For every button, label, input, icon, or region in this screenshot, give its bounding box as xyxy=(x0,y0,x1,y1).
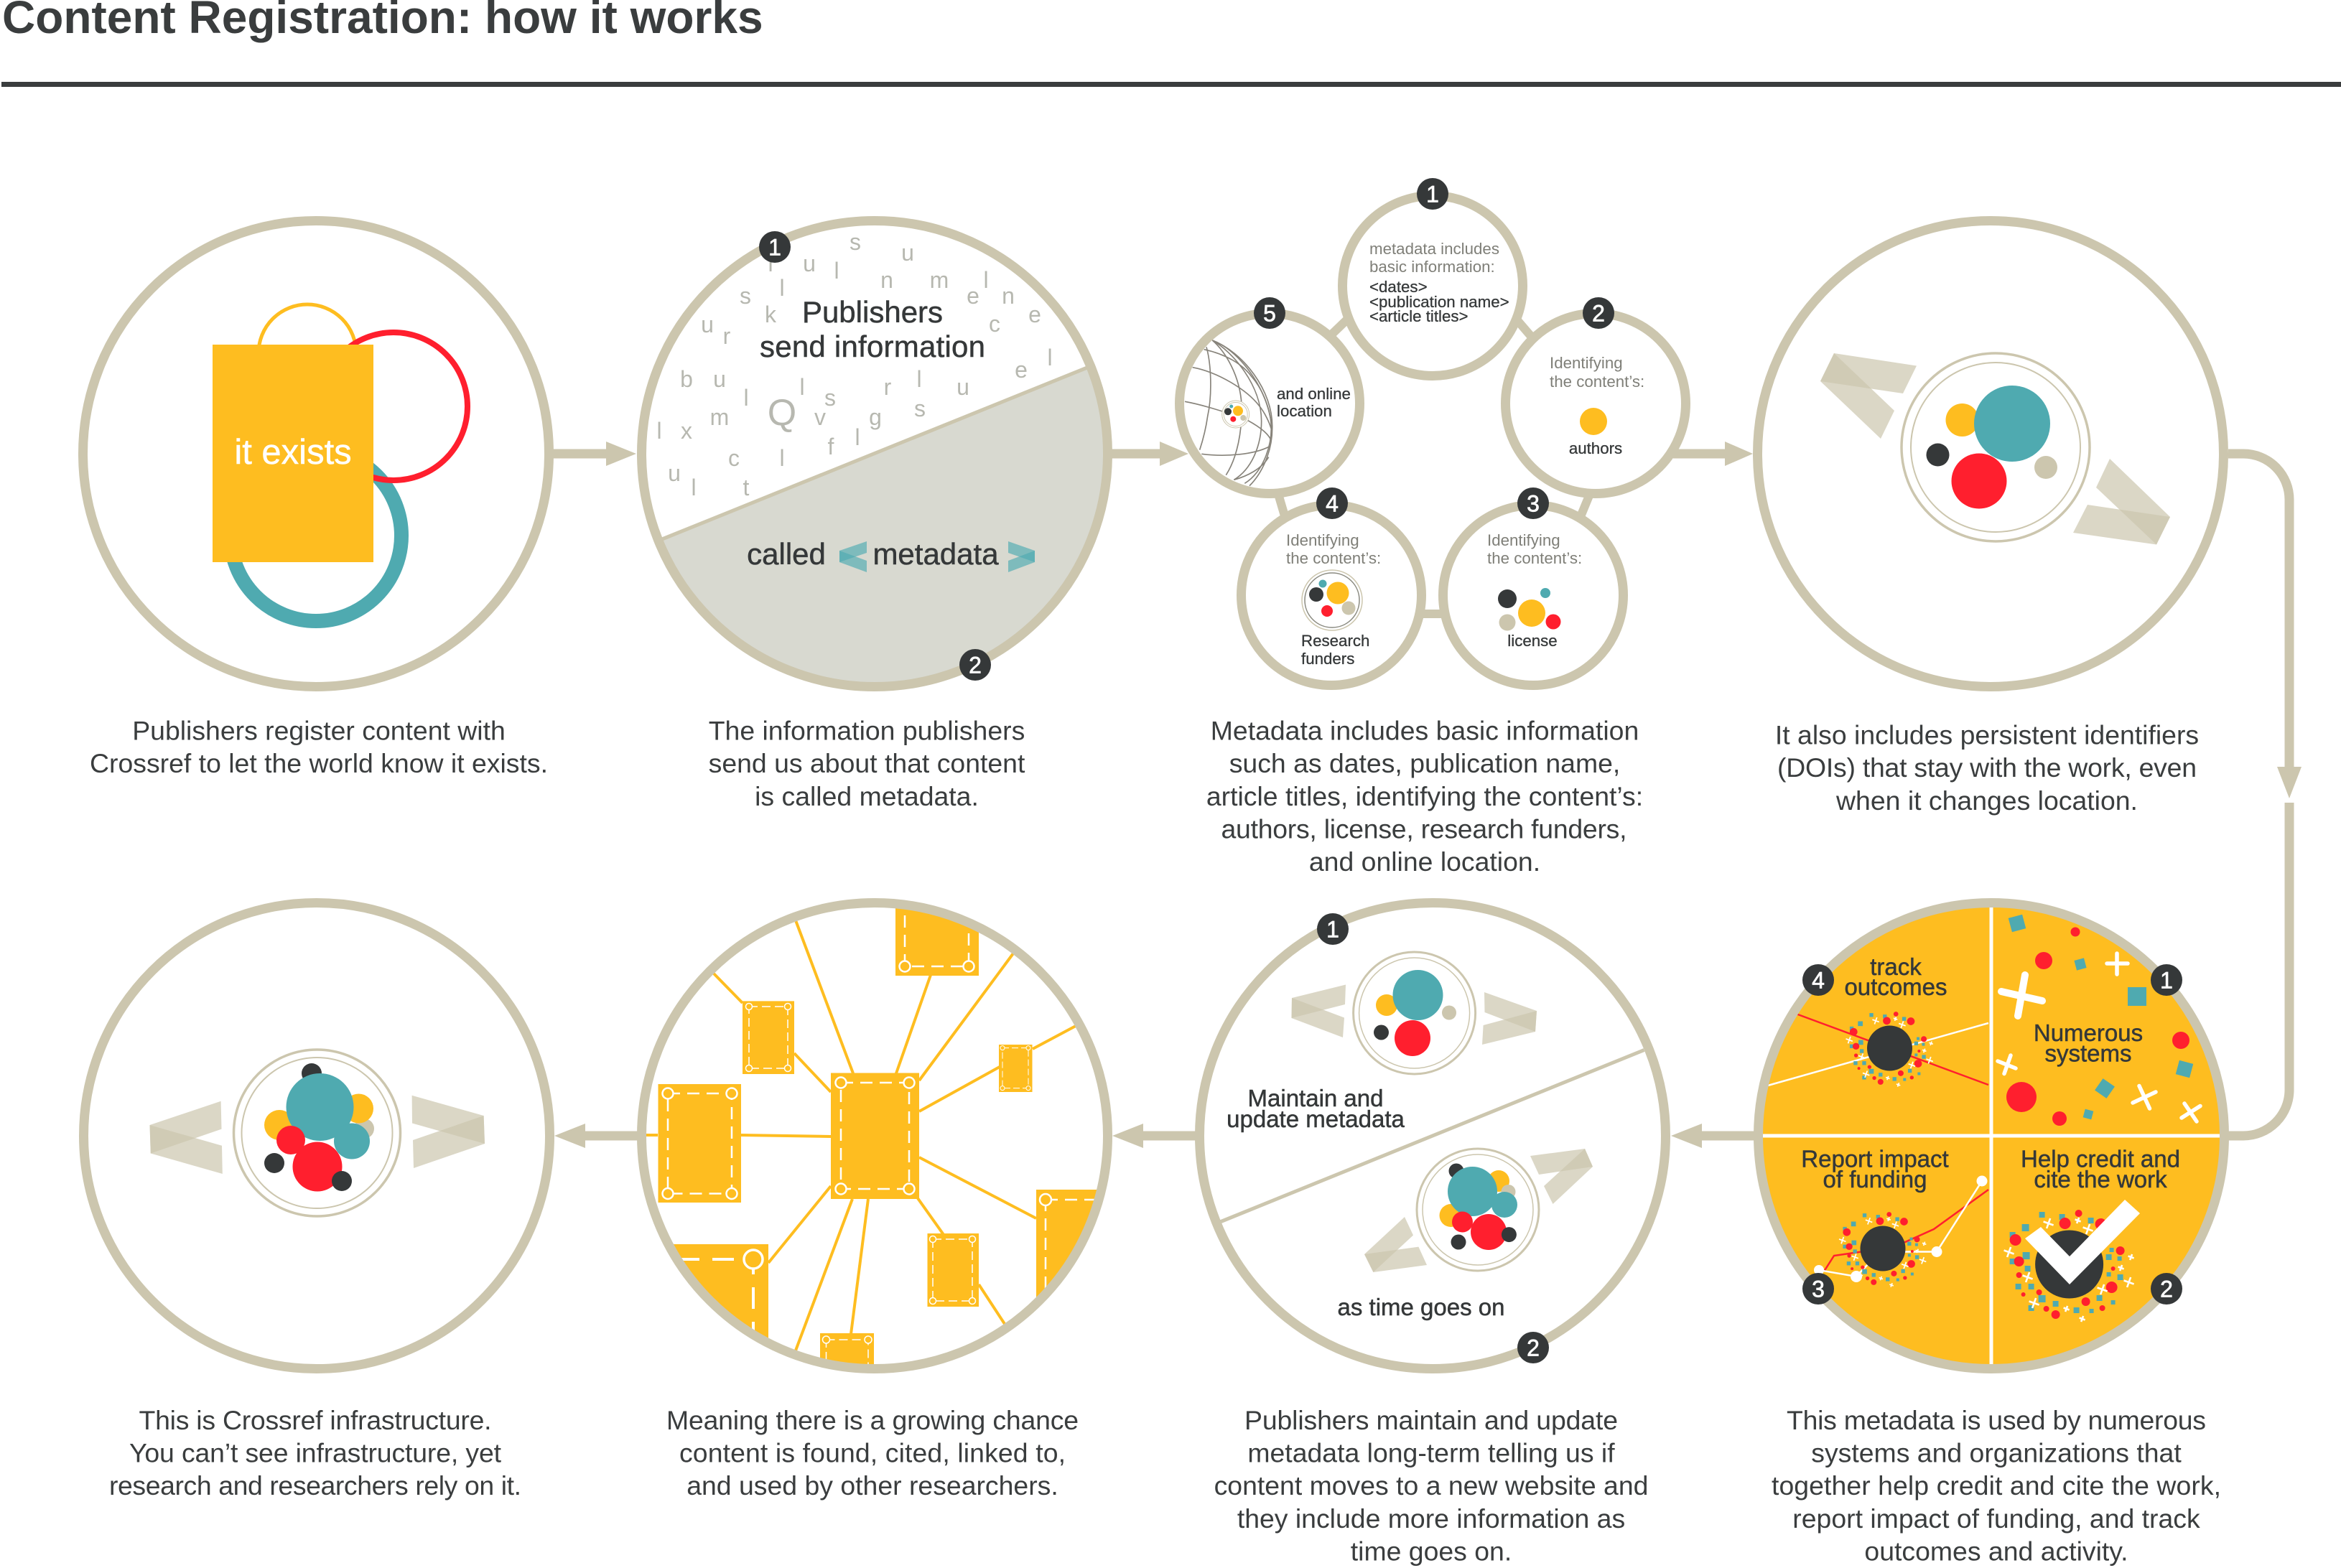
arrow: step 5 to step 6 xyxy=(1671,1124,1759,1148)
heading: publishers send information: send information xyxy=(760,330,985,363)
scattered letters: v xyxy=(814,404,826,430)
circle 2: authors: Identifying xyxy=(1550,354,1623,372)
lower right document xyxy=(928,1233,979,1307)
circle 2: authors: the content’s: xyxy=(1550,373,1644,391)
caption: step 8: research and researchers rely on it. xyxy=(109,1470,521,1501)
circle 1: basic information: <publication name> xyxy=(1369,293,1509,311)
circle 1: basic information: metadata includes xyxy=(1369,240,1499,258)
emblem xyxy=(234,1050,401,1216)
icon: red ring xyxy=(320,332,467,480)
quadrant 2: credit and cite xyxy=(2004,1146,2180,1322)
icon: top right bracket xyxy=(1482,992,1537,1045)
icon: lower right bracket xyxy=(1530,1149,1593,1204)
scattered letters: g xyxy=(869,404,882,430)
caption: step 8: You can’t see infrastructure, yet xyxy=(129,1437,502,1467)
scattered letters: s xyxy=(740,283,751,309)
header rule xyxy=(1,82,2341,87)
big right document xyxy=(1036,1190,1097,1297)
badge 1: 1 xyxy=(1426,181,1439,207)
scattered letters xyxy=(656,229,1053,500)
badge 5: 5 xyxy=(1263,300,1276,326)
scattered letters: c xyxy=(728,445,740,471)
circle 3: license: the content’s: xyxy=(1487,549,1582,567)
caption: step 8 xyxy=(109,1405,521,1501)
scattered letters: l xyxy=(1047,345,1053,370)
caption: step 2 xyxy=(709,715,1025,811)
scattered letters: u xyxy=(957,374,969,400)
arrow: step 1 to step 2 xyxy=(553,442,636,466)
badge 1 xyxy=(759,231,791,263)
heading: publishers send information xyxy=(760,295,985,363)
divider line xyxy=(662,368,1087,539)
quadrant 1: numerous systems: Numerous xyxy=(2034,1019,2143,1046)
circle 4: research funders: Identifying xyxy=(1286,531,1359,549)
panel: crossref infrastructure circle xyxy=(83,903,550,1368)
label: maintain and update metadata xyxy=(1227,1085,1405,1132)
quadrant 3: report impact of funding xyxy=(1801,1146,1988,1287)
badge 3: 3 xyxy=(1527,491,1540,517)
badge 2: 2 xyxy=(969,652,982,678)
caption: step 5: systems and organizations that xyxy=(1811,1437,2182,1467)
scattered letters: l xyxy=(768,251,773,276)
badge 2 xyxy=(1517,1332,1549,1363)
scattered letters: k xyxy=(765,302,777,327)
quadrant 3: report impact of funding: of funding xyxy=(1823,1166,1927,1193)
scattered letters: r xyxy=(884,374,892,400)
caption: step 5 xyxy=(1772,1405,2221,1567)
scattered letters: b xyxy=(680,366,693,392)
caption: step 3: Metadata includes basic information xyxy=(1211,715,1639,745)
circle 5: online location xyxy=(1179,313,1360,494)
caption: step 6: Publishers maintain and update xyxy=(1244,1405,1618,1435)
big bottom left document xyxy=(674,1244,768,1338)
circle 1: basic information xyxy=(1343,195,1522,376)
panel: numerous systems yellow circle xyxy=(1758,903,2225,1368)
badge 3 xyxy=(1517,487,1549,519)
scattered letters: l xyxy=(743,385,749,411)
icon: yellow document xyxy=(213,345,373,562)
scattered letters: m xyxy=(710,404,729,430)
centre document xyxy=(831,1073,919,1199)
quadrant 4: track outcomes: outcomes xyxy=(1844,974,1947,1000)
network links xyxy=(639,920,1076,1350)
icon: teal left bracket xyxy=(839,541,867,572)
caption: step 7: content is found, cited, linked to, xyxy=(679,1437,1066,1467)
caption: step 8: This is Crossref infrastructure. xyxy=(139,1405,491,1435)
circle 3: license xyxy=(1443,505,1623,685)
caption: step 2: The information publishers xyxy=(709,715,1025,745)
panel: network of content circle xyxy=(637,898,1112,1373)
scattered letters: s xyxy=(914,396,926,421)
caption: step 6: metadata long-term telling us if xyxy=(1247,1437,1615,1467)
badge 4 xyxy=(1802,964,1834,996)
scattered letters: r xyxy=(723,323,731,349)
caption: step 5: report impact of funding, and track xyxy=(1792,1503,2200,1534)
scattered letters: x xyxy=(681,418,692,444)
scattered letters: l xyxy=(983,267,989,293)
circle 4: research funders: the content’s: xyxy=(1286,549,1381,567)
scattered letters: l xyxy=(779,445,785,471)
scattered letters: u xyxy=(901,240,914,266)
caption: step 6: they include more information as xyxy=(1237,1503,1625,1534)
arrow: step 6 to step 7 xyxy=(1112,1124,1199,1148)
scattered letters: n xyxy=(1002,283,1015,309)
icon: top left bracket xyxy=(1291,985,1346,1037)
label: maintain and update metadata: update metadata xyxy=(1227,1106,1405,1132)
label: it exists: it exists xyxy=(234,433,352,472)
arrow: step 7 to step 8 xyxy=(554,1124,641,1148)
label: called metadata: metadata xyxy=(872,537,999,571)
caption: step 4: It also includes persistent identifiers xyxy=(1775,719,2199,750)
quadrant 4: track outcomes xyxy=(1767,953,1988,1087)
caption: step 4: when it changes location. xyxy=(1835,785,2138,816)
upper left document xyxy=(743,1001,794,1074)
scattered letters: m xyxy=(930,267,949,293)
circle 2: authors: authors xyxy=(1569,439,1622,457)
circle 3: license: Identifying xyxy=(1487,531,1560,549)
caption: step 6: time goes on. xyxy=(1351,1536,1512,1567)
scattered letters: u xyxy=(803,251,816,276)
badge 4 xyxy=(1316,487,1348,519)
icon: teal right bracket xyxy=(1008,541,1035,572)
icon: check mark xyxy=(2025,1200,2140,1284)
emblem xyxy=(1902,353,2090,541)
panel: publishers send information circle xyxy=(632,221,1120,718)
connectors xyxy=(1278,319,1590,614)
scattered letters: f xyxy=(828,434,834,459)
panel: persistent identifiers circle xyxy=(1758,221,2223,686)
scattered letters: u xyxy=(713,366,726,392)
caption: step 6: content moves to a new website and xyxy=(1214,1470,1648,1501)
badge 4: 4 xyxy=(1326,491,1339,517)
label: maintain and update metadata: Maintain and xyxy=(1248,1085,1383,1111)
scattered letters: l xyxy=(779,275,785,301)
circle 4: research funders xyxy=(1241,505,1422,685)
badge 2: 2 xyxy=(1527,1335,1540,1361)
arrow: step 4 down to step 5 xyxy=(2228,454,2302,798)
quadrant 1: numerous systems xyxy=(1998,915,2200,1126)
caption: step 3: such as dates, publication name, xyxy=(1229,748,1620,778)
ring xyxy=(1758,903,2225,1368)
arrow: step 3 to step 4 xyxy=(1673,442,1753,466)
caption: step 1 xyxy=(90,715,548,778)
label: called metadata xyxy=(747,537,999,571)
caption: step 1: Publishers register content with xyxy=(132,715,506,745)
scattered letters: e xyxy=(1028,302,1041,327)
scattered letters: s xyxy=(850,229,861,255)
badge 1: 1 xyxy=(2160,968,2173,994)
badge 1: 1 xyxy=(1326,916,1339,942)
scattered letters: t xyxy=(743,475,750,500)
mini emblem xyxy=(1222,401,1249,428)
scattered letters: e xyxy=(1015,357,1028,383)
quadrant 4: track outcomes: track xyxy=(1870,953,1922,980)
heading: publishers send information: Publishers xyxy=(802,295,943,329)
left document xyxy=(658,1084,741,1203)
caption: step 7: and used by other researchers. xyxy=(687,1470,1058,1501)
circle 5: online location: and online xyxy=(1277,385,1351,403)
top document xyxy=(895,908,979,976)
scattered letters: l xyxy=(855,424,860,450)
caption: step 4 xyxy=(1775,719,2199,816)
badge 2 xyxy=(2151,1273,2182,1305)
connector: into step 5 xyxy=(2223,803,2289,1136)
caption: step 7 xyxy=(666,1405,1079,1501)
quadrant 2: credit and cite: cite the work xyxy=(2034,1166,2167,1193)
scattered letters: c xyxy=(989,311,1000,337)
icon: yellow ring xyxy=(259,304,356,402)
icon: right bracket xyxy=(2073,459,2170,544)
badge 2 xyxy=(1583,297,1614,329)
ring xyxy=(642,903,1107,1368)
caption: step 5: together help credit and cite the work, xyxy=(1772,1470,2221,1501)
caption: step 3: and online location. xyxy=(1309,846,1540,877)
scattered letters: l xyxy=(799,374,805,400)
panel: maintain and update circle xyxy=(1199,903,1666,1368)
scattered letters: u xyxy=(701,312,714,337)
arrow: step 2 to step 3 xyxy=(1112,442,1188,466)
icon: teal ring xyxy=(231,450,401,621)
icon: left bracket xyxy=(1820,353,1917,439)
icon: lower left bracket xyxy=(1364,1217,1427,1272)
quadrant 2: credit and cite: Help credit and xyxy=(2021,1146,2180,1172)
scattered letters: l xyxy=(656,418,662,444)
divider line xyxy=(1220,1050,1644,1222)
scattered letters: u xyxy=(668,460,681,486)
ring xyxy=(642,221,1107,686)
badge 2 xyxy=(959,649,991,681)
circle 1: basic information: <article titles> xyxy=(1369,307,1469,325)
label: as time goes on: as time goes on xyxy=(1338,1294,1504,1320)
scattered letters: s xyxy=(824,385,836,411)
scattered letters: e xyxy=(967,283,979,309)
badge 1 xyxy=(2151,964,2182,996)
bottom document xyxy=(820,1333,874,1364)
metadata grey half xyxy=(664,370,1103,682)
caption: step 2: is called metadata. xyxy=(755,781,979,811)
badge 4: 4 xyxy=(1812,968,1825,994)
badge 2: 2 xyxy=(2160,1277,2173,1302)
panel: metadata five small circles xyxy=(1179,178,1686,685)
circle 5: online location: location xyxy=(1277,402,1332,420)
scattered letters: l xyxy=(916,366,922,392)
circle 2: authors xyxy=(1505,313,1686,494)
quadrant 1: numerous systems: systems xyxy=(2044,1040,2132,1067)
caption: step 3 xyxy=(1206,715,1643,877)
caption: step 2: send us about that content xyxy=(709,748,1025,778)
label: called metadata: called xyxy=(747,537,826,571)
caption: step 7: Meaning there is a growing chance xyxy=(666,1405,1079,1435)
top emblem xyxy=(1354,952,1476,1074)
icon: right bracket xyxy=(412,1096,485,1168)
circle 4: research funders: Research xyxy=(1301,632,1369,650)
badge 1 xyxy=(1417,178,1448,210)
network xyxy=(646,908,1097,1364)
circle 1: basic information: basic information: xyxy=(1369,258,1495,276)
badge 3: 3 xyxy=(1812,1277,1825,1302)
badge 3 xyxy=(1802,1273,1834,1305)
panel: it exists circle xyxy=(83,221,549,686)
circle 3: license: license xyxy=(1507,632,1558,650)
small right document xyxy=(999,1045,1033,1092)
circle 4: research funders: funders xyxy=(1301,650,1354,668)
scattered letters: l xyxy=(691,475,697,500)
caption: step 4: (DOIs) that stay with the work, even xyxy=(1777,752,2197,783)
white cross dividers xyxy=(1759,903,2224,1368)
scattered letters: n xyxy=(880,267,893,293)
caption: step 5: outcomes and activity. xyxy=(1864,1536,2128,1567)
quadrant 3: report impact of funding: Report impact xyxy=(1801,1146,1949,1172)
badge 5 xyxy=(1254,297,1285,329)
badge 1 xyxy=(1317,913,1349,945)
caption: step 6 xyxy=(1214,1405,1648,1567)
lower emblem xyxy=(1417,1149,1539,1271)
globe xyxy=(1185,340,1272,486)
caption: step 1: Crossref to let the world know it exists. xyxy=(90,748,548,778)
scattered letters: Q xyxy=(768,392,796,434)
circle 1: basic information: <dates> xyxy=(1369,278,1428,296)
caption: step 5: This metadata is used by numerous xyxy=(1787,1405,2206,1435)
icon: left bracket xyxy=(149,1101,223,1174)
caption: step 3: authors, license, research funders, xyxy=(1221,814,1627,844)
badge 2: 2 xyxy=(1592,300,1605,326)
caption: step 3: article titles, identifying the content’s: xyxy=(1206,781,1643,811)
badge 1: 1 xyxy=(768,234,781,260)
scattered letters: l xyxy=(834,258,839,284)
